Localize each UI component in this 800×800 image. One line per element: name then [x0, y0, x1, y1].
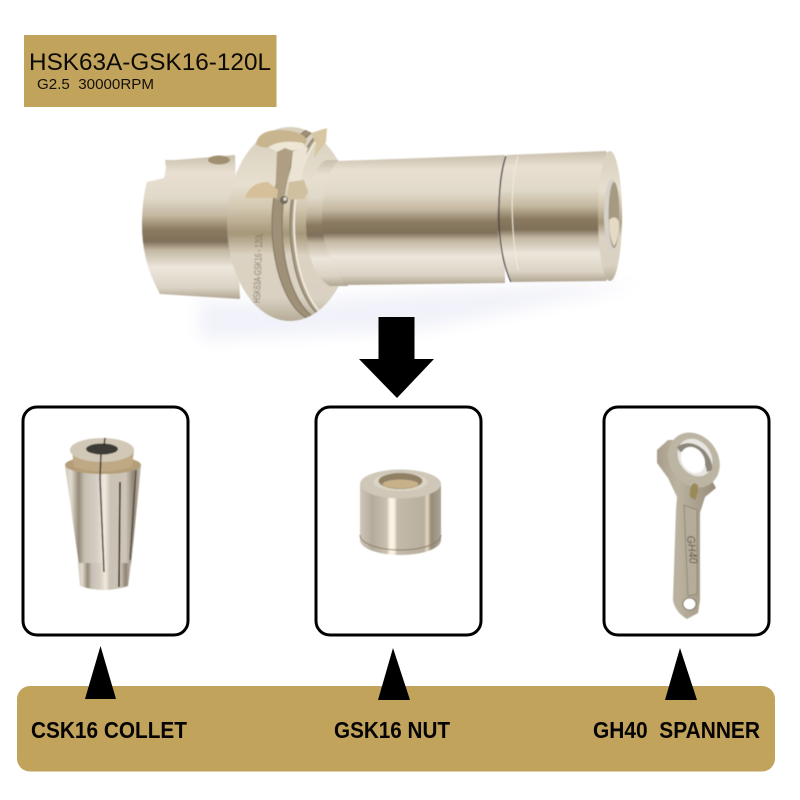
collet image [65, 438, 141, 590]
soft reflection [200, 285, 640, 340]
spanner image [657, 422, 730, 619]
product title: HSK63A-GSK16-120L [29, 49, 271, 76]
label: spanner: GH40 SPANNER [593, 717, 760, 743]
header label [24, 35, 276, 107]
engraved spanner mark: GH40 [684, 535, 699, 565]
product photo: tool holder [142, 125, 640, 340]
panel: nut [316, 407, 481, 635]
label: nut: GSK16 NUT [334, 717, 451, 743]
neck collar [306, 160, 348, 286]
specifications: G2.5 30000RPM [37, 77, 154, 93]
flange [226, 126, 339, 322]
collet pointer [85, 646, 116, 699]
engraved model text: HSK63A-GSK16 - 120L [252, 232, 265, 303]
arrow: down [359, 317, 434, 398]
label: collet: CSK16 COLLET [31, 717, 188, 743]
long body cylinder [322, 155, 505, 285]
panel: collet [23, 407, 188, 635]
panel: spanner [604, 407, 769, 635]
nut [497, 151, 622, 282]
label bar [17, 646, 775, 772]
nut pointer [378, 648, 410, 700]
nut image [360, 470, 441, 555]
shank [142, 155, 240, 299]
spanner pointer [665, 648, 697, 700]
